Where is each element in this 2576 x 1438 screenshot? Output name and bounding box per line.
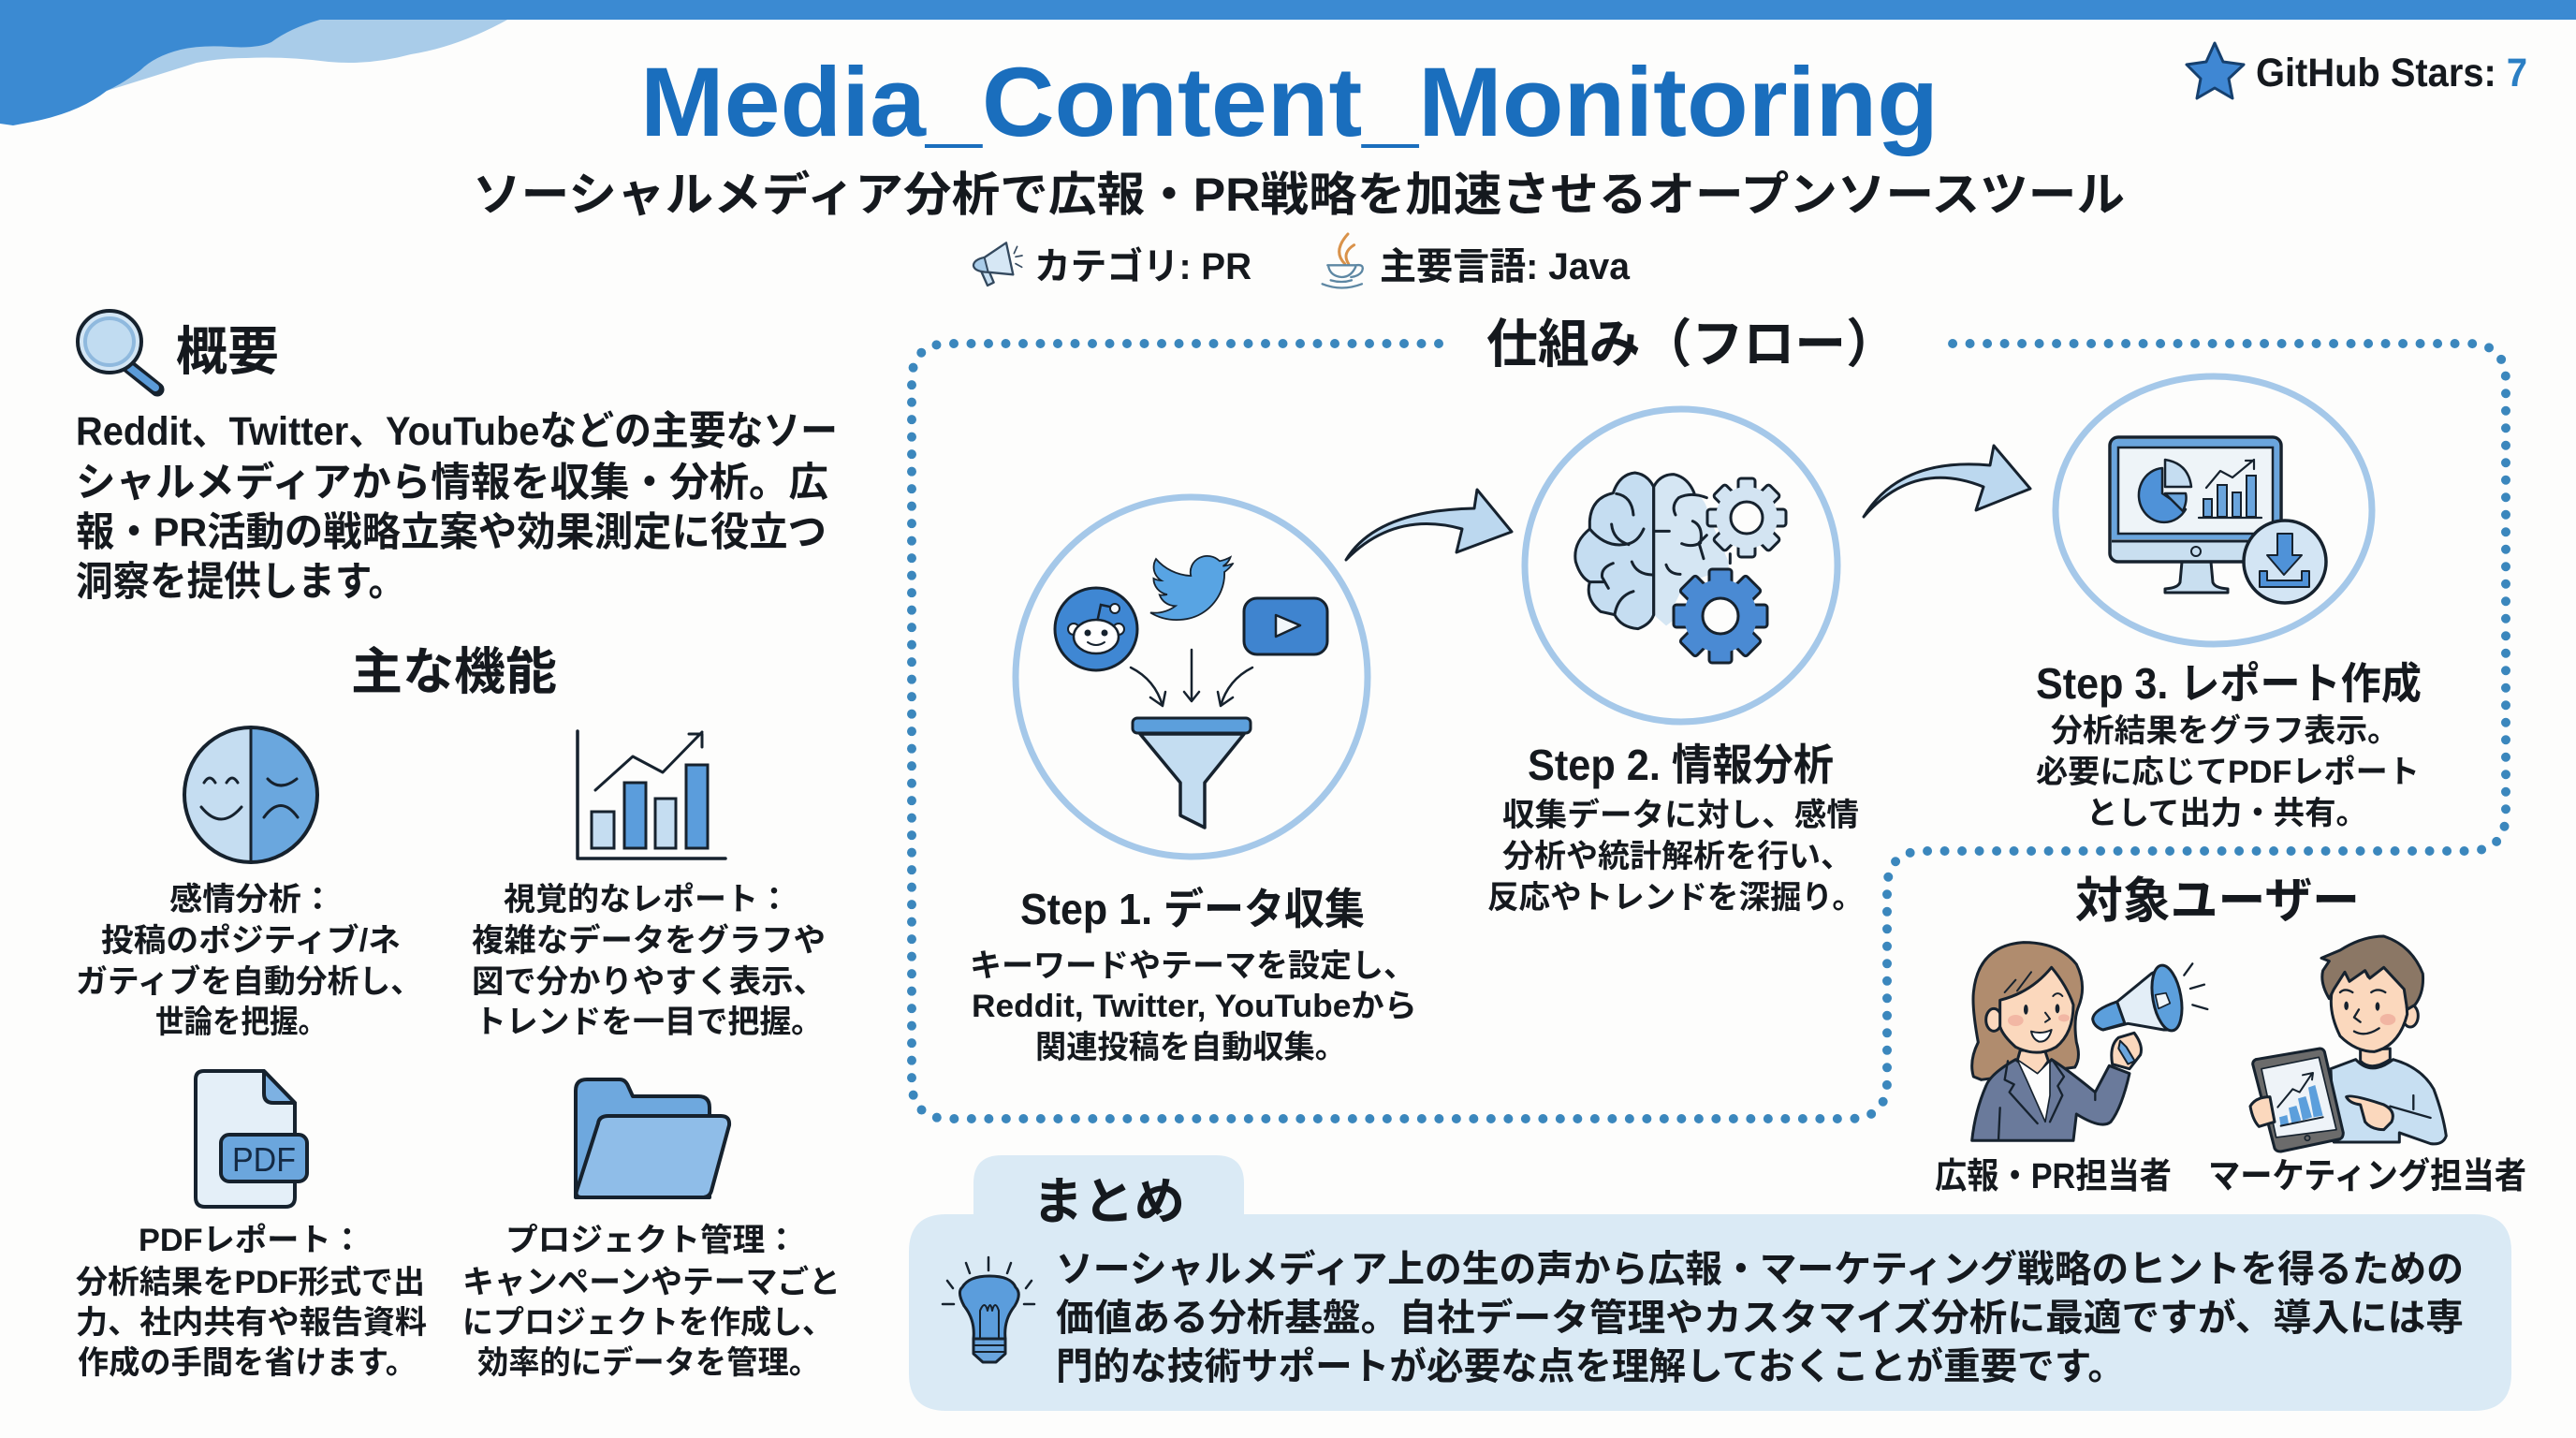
subtitle: ソーシャルメディア分析で広報・PR戦略を加速させるオープンソースツール — [473, 169, 2125, 221]
arrow: step 2 to 3 — [1864, 446, 2030, 517]
arrow: step 1 to 2 — [1346, 490, 1512, 560]
step 1 text: 関連投稿を自動収集。 — [1035, 1030, 1346, 1065]
icon: split face — [184, 727, 317, 862]
step 2 text: 収集データに対し、感情 — [1502, 797, 1859, 833]
step 3 text: 分析結果をグラフ表示。 — [2051, 713, 2399, 749]
icon: large gear — [1674, 569, 1767, 663]
icon: light bulb — [943, 1257, 1034, 1362]
pdf report text: 作成の手間を省けます。 — [78, 1345, 417, 1381]
label: marketing staff: マーケティング担当者 — [2208, 1157, 2526, 1196]
label: PR staff: 広報・PR担当者 — [1935, 1157, 2172, 1196]
icon: reddit — [1055, 588, 1137, 670]
target users heading: 対象ユーザー — [2075, 874, 2360, 929]
step 2 text: 分析や統計解析を行い、 — [1502, 839, 1852, 874]
title: Media_Content_Monitoring — [640, 48, 1939, 157]
icon: arrows into funnel — [1131, 650, 1252, 706]
panel: target users — [1935, 874, 2526, 1196]
features heading: 主な機能 — [351, 644, 557, 700]
pdf report text: PDFレポート： — [139, 1223, 363, 1258]
sentiment text — [76, 882, 422, 1040]
step 2 text — [1487, 797, 1864, 916]
summary text: ソーシャルメディア上の生の声から広報・マーケティング戦略のヒントを得るための — [1056, 1248, 2464, 1290]
top banner wave — [0, 0, 2576, 125]
icon: folder — [576, 1079, 729, 1197]
summary tab and box — [909, 1155, 2511, 1411]
project management text: にプロジェクトを作成し、 — [462, 1305, 833, 1341]
icon: twitter bird — [1150, 556, 1233, 620]
panel: flow dotted frame — [912, 344, 2506, 1119]
icon: download badge — [2244, 521, 2326, 603]
step 2 text: 反応やトレンドを深掘り。 — [1487, 880, 1864, 916]
step 1 text: キーワードやテーマを設定し、 — [970, 948, 1415, 984]
icon: bar chart — [578, 731, 725, 858]
illustration: PR woman with megaphone — [1972, 943, 2207, 1140]
summary text: 門的な技術サポートが必要な点を理解しておくことが重要です。 — [1056, 1346, 2125, 1387]
project management text: キャンペーンやテーマごと — [462, 1265, 841, 1300]
github stars — [2187, 43, 2527, 98]
pdf report text: 力、社内共有や報告資料 — [76, 1305, 427, 1341]
project management text: プロジェクト管理： — [505, 1223, 798, 1258]
feature: pdf report — [76, 1071, 427, 1381]
visual report text: 視覚的なレポート： — [504, 882, 790, 917]
panel: overview — [76, 311, 838, 605]
icon: megaphone — [973, 242, 1022, 286]
visual report text — [472, 882, 826, 1040]
icon: youtube — [1244, 598, 1327, 654]
language meta — [1323, 234, 1631, 287]
overview text — [76, 409, 838, 605]
icon: pdf document — [196, 1071, 307, 1207]
icon: pdf document: PDF — [232, 1140, 296, 1179]
pdf report text — [76, 1223, 427, 1381]
stars label: GitHub Stars: 7 — [2256, 51, 2527, 95]
visual report text: 図で分かりやすく表示、 — [472, 964, 826, 1000]
step 3 text: 必要に応じてPDFレポート — [2036, 755, 2420, 790]
overview heading: 概要 — [176, 322, 279, 381]
summary heading: まとめ — [1032, 1174, 1185, 1230]
visual report text: トレンドを一目で把握。 — [475, 1005, 823, 1040]
summary text: 価値ある分析基盤。自社データ管理やカスタマイズ分析に最適ですが、導入には専 — [1056, 1297, 2464, 1339]
summary text — [1056, 1248, 2464, 1387]
sentiment text: ガティブを自動分析し、 — [76, 963, 422, 1000]
step 3 — [2036, 376, 2422, 831]
step 1 — [970, 497, 1417, 1065]
overview text: 洞察を提供します。 — [76, 560, 405, 605]
panel: summary — [909, 1155, 2511, 1411]
feature: project management — [462, 1079, 841, 1381]
icon: magnifier — [78, 311, 157, 389]
sentiment text: 世論を把握。 — [155, 1005, 327, 1040]
icon: star — [2187, 43, 2244, 98]
icon: monitor with charts — [2110, 437, 2281, 593]
language label: 主要言語: Java — [1380, 246, 1631, 287]
sentiment text: 投稿のポジティブ/ネ — [101, 922, 401, 959]
icon: funnel — [1133, 718, 1251, 828]
step 3 text: として出力・共有。 — [2086, 796, 2367, 831]
step 2 title: Step 2. 情報分析 — [1528, 741, 1834, 789]
overview text: Reddit、Twitter、YouTubeなどの主要なソー — [76, 409, 838, 454]
icon: small gear — [1707, 478, 1786, 557]
step 1 text — [970, 948, 1417, 1065]
step 1 title: Step 1. データ収集 — [1020, 885, 1365, 933]
step 3 text — [2036, 713, 2420, 831]
category label: カテゴリ: PR — [1034, 246, 1251, 287]
overview text: シャルメディアから情報を収集・分析。広 — [76, 460, 828, 506]
overview text: 報・PR活動の戦略立案や効果測定に役立つ — [76, 510, 827, 555]
project management text: 効率的にデータを管理。 — [477, 1344, 820, 1381]
step 2 circle — [1525, 409, 1837, 722]
step 2 — [1487, 409, 1864, 916]
step 3 circle — [2056, 376, 2372, 644]
sentiment text: 感情分析： — [169, 882, 334, 917]
feature: visual report — [472, 731, 826, 1040]
feature: sentiment analysis — [76, 727, 422, 1040]
pdf report text: 分析結果をPDF形式で出 — [76, 1265, 425, 1300]
category meta — [973, 242, 1251, 287]
project management text — [462, 1223, 841, 1381]
illustration: marketing man with tablet — [2250, 936, 2446, 1152]
step 1 text: Reddit, Twitter, YouTubeから — [972, 989, 1417, 1024]
panel: features — [76, 644, 841, 1381]
step 1 circle — [1016, 497, 1368, 857]
icon: brain — [1575, 473, 1730, 629]
step 3 title: Step 3. レポート作成 — [2036, 659, 2422, 708]
icon: java cup — [1323, 234, 1363, 287]
flow heading: 仕組み（フロー） — [1486, 315, 1897, 374]
visual report text: 複雑なデータをグラフや — [472, 922, 826, 959]
